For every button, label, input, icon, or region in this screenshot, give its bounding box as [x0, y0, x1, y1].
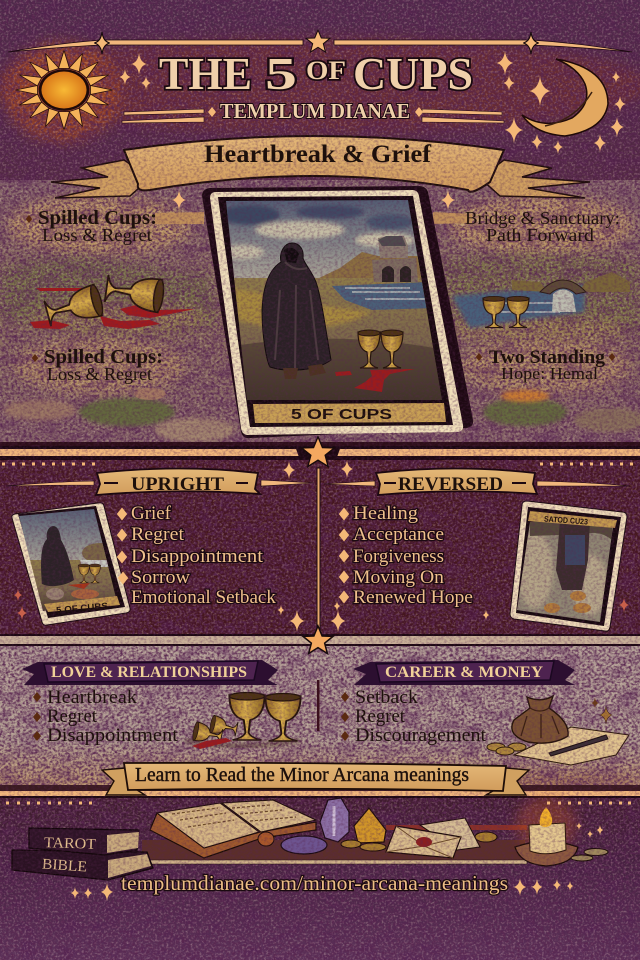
list: reversed meanings — [339, 503, 473, 608]
callout: bridge and sanctuary — [465, 208, 620, 245]
reversed ribbon heading — [324, 468, 630, 495]
band: middle maroon panel — [0, 442, 640, 460]
upright ribbon heading — [6, 468, 314, 495]
open book — [150, 800, 316, 858]
subtitle with rules: TEMPLUM DIANAE — [220, 99, 410, 123]
list: love and relationships: Disappointment — [47, 725, 179, 746]
icon: spilled cups on the ground — [30, 272, 195, 329]
list: reversed meanings: Forgiveness — [353, 546, 444, 567]
ribbon: right callout — [433, 212, 472, 224]
banner heading: Heartbreak & Grief: Heartbreak & Grief — [204, 141, 432, 168]
reversed small card — [510, 501, 627, 631]
title: OF — [306, 56, 346, 85]
list: upright meanings: Grief — [131, 503, 172, 524]
scene: landscape left and right of the card — [4, 272, 640, 442]
list: career and money: Regret — [355, 706, 406, 727]
reversed ribbon heading: REVERSED — [398, 474, 503, 495]
title: THE — [159, 48, 252, 99]
book: Tarot — [29, 828, 139, 855]
callout: spilled cups lower: Loss & Regret — [47, 364, 152, 384]
book: Bible — [12, 850, 153, 880]
ribbon: left callout — [155, 212, 204, 224]
list: career and money — [341, 687, 487, 746]
list: upright meanings: Sorrow — [131, 567, 190, 588]
list: reversed meanings: Healing — [353, 503, 419, 524]
callout: spilled cups lower — [32, 346, 163, 384]
banner: learn to read — [102, 763, 529, 795]
icon: sun — [16, 50, 112, 130]
header rule with stars — [8, 30, 632, 54]
url line with sparkles — [71, 822, 604, 901]
callout: spilled cups upper: Spilled Cups: — [38, 207, 157, 229]
career heading ribbon — [353, 660, 575, 685]
card: 5 of Cups — [202, 186, 473, 438]
card label strip — [253, 403, 446, 423]
card label strip: 5 OF CUPS — [291, 406, 392, 423]
band: tan divider above love panel — [0, 634, 640, 646]
main banner — [51, 136, 590, 198]
list: reversed meanings: Renewed Hope — [353, 587, 473, 608]
list: upright meanings: Regret — [131, 524, 185, 545]
title: 5 — [265, 48, 297, 99]
dots beneath rule — [6, 802, 631, 804]
callout: spilled cups upper: Loss & Regret — [42, 225, 152, 245]
callout: two standing — [476, 347, 615, 383]
list: reversed meanings: Moving On — [353, 567, 445, 588]
icon: upright cups and fallen cups — [185, 692, 301, 749]
book: Bible: BIBLE — [41, 856, 87, 876]
dots and sparkles in middle panel — [2, 460, 633, 632]
center divider — [317, 468, 320, 630]
callout: spilled cups upper — [26, 207, 157, 245]
list: love and relationships — [33, 687, 179, 746]
career heading ribbon: CAREER & MONEY — [385, 664, 543, 681]
list: upright meanings: Disappointment — [131, 546, 264, 567]
callout: two standing: Hope: Hemal — [501, 364, 598, 383]
list: upright meanings: Emotional Setback — [131, 587, 276, 608]
callout: two standing: Two Standing — [489, 347, 606, 368]
divider: love and career — [317, 680, 320, 731]
list: upright meanings — [117, 503, 276, 608]
card artwork — [220, 198, 450, 405]
list: love and relationships: Heartbreak — [47, 687, 138, 708]
upright small card: 5 OF CUBS — [56, 601, 108, 615]
band: rule beneath love panel — [0, 785, 640, 798]
icon: two standing cups by the river — [483, 296, 529, 328]
title: CUPS — [353, 48, 473, 99]
callout: bridge and sanctuary: Path Forward — [486, 225, 594, 245]
title — [159, 48, 473, 99]
list: love and relationships: Regret — [47, 706, 98, 727]
upright small card — [12, 503, 130, 625]
decorative stars around title — [119, 51, 626, 210]
list: reversed meanings: Acceptance — [353, 524, 444, 545]
love heading ribbon: LOVE & RELATIONSHIPS — [51, 664, 247, 681]
callout: spilled cups lower: Spilled Cups: — [44, 346, 163, 368]
icon: coin purse, letter and pen — [487, 696, 629, 765]
banner: learn to read: Learn to Read the Minor Arcana meanings — [135, 764, 469, 786]
figure in dark cloak — [262, 243, 331, 379]
love heading ribbon — [22, 660, 278, 685]
subtitle with rules — [122, 99, 504, 123]
icon: crescent moon — [522, 59, 608, 136]
crystals, coins and envelope — [281, 798, 497, 858]
star: middle rule — [302, 437, 334, 466]
shelf of books and curios — [12, 797, 608, 880]
book: Tarot: TAROT — [44, 835, 96, 853]
list: career and money: Setback — [355, 687, 419, 708]
star: lower divider — [303, 626, 333, 654]
upright ribbon heading: UPRIGHT — [131, 474, 224, 495]
candle in dish — [515, 797, 608, 866]
callout: bridge and sanctuary: Bridge & Sanctuary: — [465, 208, 620, 228]
url line with sparkles: templumdianae.com/minor-arcana-meanings — [121, 871, 508, 895]
reversed small card: SATOD CU23 — [544, 514, 589, 527]
list: career and money: Discouragement — [355, 725, 487, 746]
